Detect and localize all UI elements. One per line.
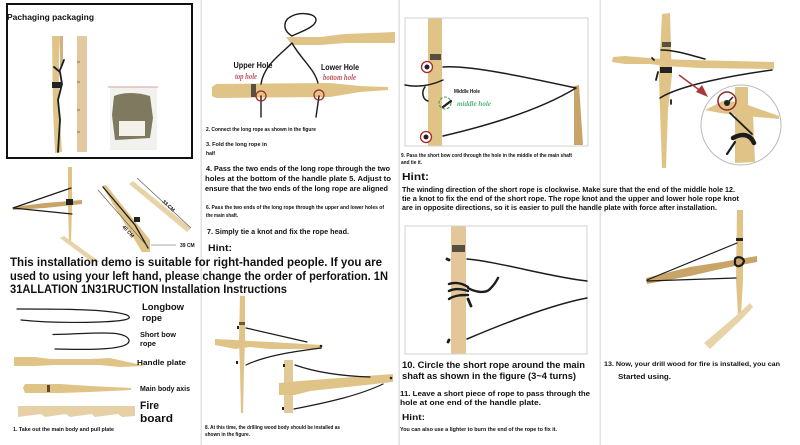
part: main body axis [23, 384, 190, 393]
photo: finished fire drill [646, 210, 757, 349]
step 9 caption: 9. Pass the short bow cord through the hole in the middle of the main shaft [401, 153, 572, 159]
step 11 caption [400, 391, 590, 407]
step 8 caption: 8. At this time, the drilling wood body should be installed as [205, 425, 340, 431]
part: fire board: Fire [140, 400, 159, 412]
steps 4 and 5: ensure that the two ends of the long rope are aligned [205, 184, 388, 193]
step 6 caption: 6. Pass the two ends of the long rope through the upper and lower holes of [206, 205, 384, 211]
label: upper hole: Upper Hole [234, 61, 273, 70]
part: longbow rope: rope [142, 313, 162, 323]
part: short bow rope: Short bow [140, 330, 176, 339]
photo: drill body with handle plate front [215, 296, 322, 413]
notice: right-handed installation demo: 31ALLATION 1N31RUCTION Installation Instructions [10, 284, 287, 296]
part: main body axis: Main body axis [140, 386, 190, 393]
part: longbow rope: Longbow [142, 302, 185, 312]
step 11 caption: hole at one end of the handle plate. [400, 400, 541, 407]
part: fire board [18, 400, 173, 425]
label: bottom hole handwritten: bottom hole [323, 73, 356, 82]
notice: right-handed installation demo [10, 257, 388, 296]
panel: parts list [13, 302, 190, 433]
packaged parts photo [52, 36, 158, 153]
step 10 caption: shaft as shown in the figure (3~4 turns) [402, 371, 576, 381]
steps 4 and 5: 4. Pass the two ends of the long rope through the two [206, 164, 390, 173]
part: longbow rope [17, 302, 185, 323]
step 6 caption: the main shaft. [206, 213, 239, 219]
label: middle hole: Middle Hole [454, 89, 480, 95]
steps 4 and 5 [205, 164, 391, 193]
hint text: winding direction: The winding direction of the short rope is clockwise. Make sure that the end of the middle hole 12. [402, 187, 735, 194]
step 8 caption: shown in the figure. [205, 432, 251, 438]
step 2 caption: 2. Connect the long rope as shown in the figure [206, 127, 316, 133]
label: middle hole handwritten: middle hole [457, 99, 492, 108]
photo: short rope wound around shaft [405, 226, 587, 354]
step 6 caption [206, 205, 384, 219]
notice: right-handed installation demo: used to using your left hand, please change the order of perforation. 1N [10, 271, 388, 283]
hint text: lighter: You can also use a lighter to burn the end of the rope to fix it. [400, 427, 558, 433]
dimension: 40 CM: 40 CM [121, 224, 135, 239]
step 9 caption [401, 153, 572, 166]
part: fire board: board [140, 413, 173, 425]
hint heading: Hint: [402, 412, 425, 422]
packaging heading: Pachaging packaging [7, 13, 94, 22]
step 10 caption: 10. Circle the short rope around the main [402, 360, 585, 370]
step 3 caption second line: half [206, 151, 215, 157]
step 1 caption: 1. Take out the main body and pull plate [13, 427, 114, 433]
step 13 caption second line: Started using. [618, 374, 671, 381]
panel: step 8 drill bodies [205, 296, 393, 438]
dimension: 39 CM: 39 CM [180, 243, 195, 249]
photo: short rope through middle hole [405, 18, 588, 146]
step 8 caption [205, 425, 340, 438]
photo: drill body with handle plate rear [279, 360, 393, 413]
step 13 caption: 13. Now, your drill wood for fire is installed, you can [604, 361, 780, 368]
step 3 caption: 3. Fold the long rope in [206, 142, 268, 148]
photo: drill with handle plate attached [612, 13, 774, 168]
step 7 caption: 7. Simply tie a knot and fix the rope head. [207, 227, 349, 236]
photo: assembled drill with dimensions [13, 167, 191, 262]
arrow: to detail view [679, 75, 708, 97]
part: handle plate [14, 357, 186, 367]
panel: step 12 fastened rope [612, 13, 781, 168]
panel: step 13 finished drill [604, 210, 780, 381]
panel: packaging [7, 4, 192, 158]
label: lower hole: Lower Hole [321, 63, 359, 72]
step 10 caption [402, 360, 585, 381]
hint text: winding direction: tie a knot to fix the end of the short rope. The rope knot and the upper and lower hole rope knot [402, 196, 740, 203]
steps 4 and 5: holes at the bottom of the handle plate 5. Adjust to [205, 174, 391, 183]
hint text: winding direction: are in opposite directions, so it is easier to pull the handle plate with force after installation. [402, 205, 717, 212]
part: handle plate: Handle plate [137, 358, 186, 367]
hint heading: Hint: [208, 243, 232, 253]
hint heading: Hint: [402, 172, 429, 183]
panel: short rope steps [400, 18, 740, 433]
photo: long rope threaded through holes [212, 14, 395, 117]
dimension: 33 CM: 33 CM [161, 199, 176, 213]
notice: right-handed installation demo: This installation demo is suitable for right-handed people. If you are [10, 257, 382, 269]
label: top hole handwritten: top hole [235, 72, 257, 81]
part: short bow rope [53, 330, 176, 349]
hint text: winding direction [402, 187, 740, 212]
part: short bow rope: rope [140, 339, 156, 348]
step 11 caption: 11. Leave a short piece of rope to pass through the [400, 391, 590, 398]
packaging frame [7, 4, 192, 158]
panel: long rope steps [205, 14, 395, 253]
detail inset: middle hole knot [701, 85, 781, 165]
step 9 caption: and tie it. [401, 160, 423, 166]
